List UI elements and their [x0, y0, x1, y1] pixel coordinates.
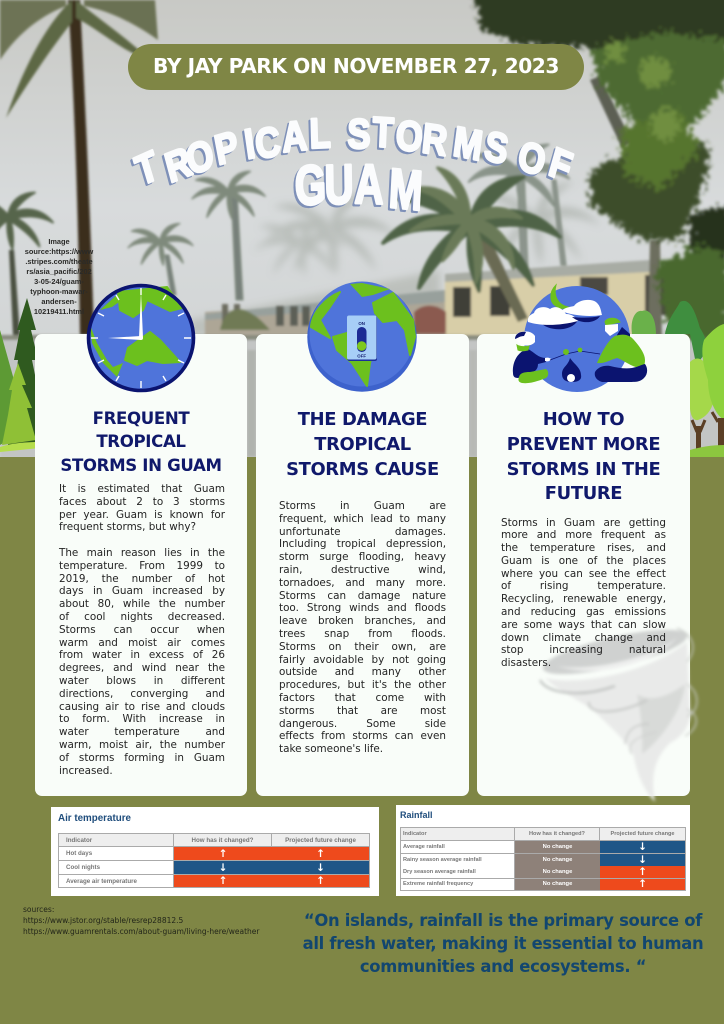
table grid	[400, 827, 686, 891]
body text: stop increasing natural	[501, 644, 666, 656]
body text: 2019, the number of hot	[59, 573, 225, 585]
body text: Storms in Guam are	[279, 500, 446, 512]
sources: https://www.jstor.org/stable/resrep28812.5	[23, 916, 183, 925]
icon: people around campfire with globe	[512, 284, 648, 392]
background photo: storm-blown palms and building	[0, 0, 724, 457]
body text: outside and many other	[279, 666, 446, 678]
table grid: ↑	[219, 848, 227, 860]
body text	[58, 483, 226, 777]
body text: Guam is one of the places	[501, 555, 666, 567]
body text: of rising temperature.	[501, 580, 666, 592]
sources: sources:	[23, 905, 54, 914]
chart: air temperature table	[51, 807, 379, 896]
body text: factors that come with	[279, 692, 446, 704]
body text: effects from storms can even	[279, 730, 446, 742]
image source credit: rs/asia_pacific/202	[26, 267, 92, 276]
table grid: Dry season average rainfall	[403, 869, 476, 875]
panel: the damage tropical storms cause	[256, 334, 469, 796]
sources: https://www.guamrentals.com/about-guam/living-here/weather	[23, 927, 260, 936]
image source credit: source:https://www	[25, 247, 93, 256]
body text: about 80, while the number	[59, 598, 225, 610]
heading	[286, 409, 439, 480]
body text: the temperature rises, and	[501, 542, 666, 554]
panel: how to prevent more storms	[477, 334, 690, 796]
byline pill	[128, 44, 584, 90]
icon: globe with on-off switch: OFF	[357, 354, 366, 358]
quote	[303, 911, 703, 976]
icon: tornado	[538, 627, 700, 803]
far palms	[128, 144, 569, 300]
body text: directions, converging and	[59, 688, 225, 700]
body text: rain, destructive wind,	[279, 564, 446, 576]
table grid	[58, 833, 370, 888]
image source credit: andersen-	[41, 297, 77, 306]
body text: Storms can occur when	[59, 624, 225, 636]
left big palm	[68, 0, 94, 335]
image source credit: 10219411.html	[34, 307, 84, 316]
body text: are some ways that can slow	[501, 619, 666, 631]
heading: THE DAMAGE	[298, 409, 427, 430]
sticks	[550, 351, 600, 360]
image source credit: typhoon-mawar-	[30, 287, 88, 296]
right foliage	[470, 0, 724, 340]
image source credit: 3-05-24/guam-	[34, 277, 84, 286]
table grid: ↑	[219, 875, 227, 887]
body text: unfortunate damages.	[279, 526, 446, 538]
image source credit: Image	[48, 237, 70, 246]
body text: frequent, which lead to many	[279, 513, 446, 525]
body text: faces about 2 to 3 storms	[59, 496, 225, 508]
body text: dangerous. Some side	[279, 718, 446, 730]
campfire	[562, 358, 581, 382]
table grid: Indicator	[66, 836, 92, 844]
table grid: How has it changed?	[529, 831, 585, 837]
body text: tornadoes, and many more.	[279, 577, 446, 589]
table grid: ↓	[316, 862, 325, 874]
table grid: No change	[543, 844, 572, 850]
left person	[513, 349, 546, 378]
icon: illustrated pine trees, left	[0, 298, 36, 452]
heading: TROPICAL	[314, 434, 411, 455]
table grid: Rainy season average rainfall	[403, 856, 482, 862]
heading: PREVENT MORE	[507, 434, 660, 455]
table grid: Average rainfall	[403, 844, 445, 850]
quote: communities and ecosystems. “	[360, 957, 646, 976]
heading: TROPICAL	[96, 432, 186, 451]
body text: temperature. From 1999 to	[59, 560, 225, 572]
body text: water temperature and	[59, 726, 225, 738]
body text: warm, moist air, the number	[59, 739, 225, 751]
table grid: Projected future change	[285, 836, 356, 844]
body text: and reducing gas emissions	[501, 606, 666, 618]
table grid: ↓	[638, 841, 647, 853]
body text: Including tropical depression,	[279, 538, 446, 550]
body text: of storms forming in Guam	[59, 752, 225, 764]
sources	[23, 905, 260, 936]
heading	[507, 409, 660, 504]
body text: down climate change and	[501, 632, 666, 644]
table grid: Projected future change	[610, 831, 675, 837]
body text: Recycling, renewable energy,	[501, 593, 666, 605]
table grid: Hot days	[66, 850, 92, 857]
table grid: How has it changed?	[192, 836, 253, 844]
body text: procedures, but it's the other	[279, 679, 446, 691]
body text: trees snap from floods.	[279, 628, 446, 640]
body text: The main reason lies in the	[59, 547, 225, 559]
olive lower background	[0, 457, 724, 1024]
icon: globe with on-off switch	[307, 282, 417, 392]
table grid: ↓	[638, 854, 647, 866]
title: Tropical Storms of Guam: GUAM	[294, 154, 424, 223]
body text: water blows in different	[59, 675, 225, 687]
trunk behind foliage	[590, 76, 632, 148]
chart: rainfall table	[396, 805, 690, 896]
table grid: ↓	[219, 862, 227, 874]
table grid: ↑	[638, 878, 647, 890]
heading: STORMS CAUSE	[286, 459, 439, 480]
heading	[60, 408, 222, 474]
heading: FUTURE	[545, 483, 622, 504]
switch	[348, 316, 377, 361]
table grid: ↑	[316, 848, 325, 860]
body text: disasters.	[501, 657, 551, 669]
body text: degrees, and wind near the	[59, 662, 225, 674]
body text: from water in excess of 26	[59, 649, 225, 661]
table grid: ↑	[638, 866, 647, 878]
heading: FREQUENT	[93, 408, 189, 428]
heading: HOW TO	[543, 409, 624, 430]
table grid: No change	[543, 856, 572, 862]
panel: frequent tropical storms	[35, 334, 247, 796]
body text: Storms on their own, are	[279, 641, 446, 653]
leaning palm	[468, 222, 528, 322]
body text: increased.	[59, 765, 113, 777]
body text: It is estimated that Guam	[59, 483, 225, 495]
body text	[501, 516, 666, 669]
body text: to form. With increase in	[59, 713, 225, 725]
heading: STORMS IN THE	[507, 459, 660, 480]
body text: storms that are most	[279, 705, 446, 717]
body text: causing air to rise and clouds	[59, 701, 225, 713]
image source credit	[25, 237, 94, 316]
quote: all fresh water, making it essential to human	[303, 934, 703, 953]
clouds	[540, 320, 578, 329]
table grid: ↑	[316, 875, 325, 887]
right person	[617, 327, 630, 340]
body text: fairly avoidable by not going	[279, 654, 446, 666]
table grid: No change	[543, 869, 572, 875]
body text: storm surge flooding, heavy	[279, 551, 446, 563]
byline pill: BY JAY PARK ON NOVEMBER 27, 2023	[153, 54, 559, 78]
table grid: Indicator	[403, 831, 427, 837]
table grid: Average air temperature	[66, 878, 137, 884]
body text: more and more frequent as	[501, 529, 666, 541]
table title: Air temperature	[58, 813, 131, 824]
body text: Storms can damage nature	[279, 590, 446, 602]
building	[205, 300, 445, 338]
body text: leave broken branches, and	[279, 615, 446, 627]
icon: globe with on-off switch: ON	[358, 321, 365, 326]
body text: warm and moist air comes	[59, 637, 225, 649]
ground	[0, 336, 724, 458]
body text: where you can see the effect	[501, 568, 666, 580]
table grid: No change	[543, 881, 572, 887]
table title: Rainfall	[400, 810, 433, 820]
icon: illustrated green trees, right	[632, 301, 724, 457]
body text	[279, 500, 446, 755]
title: Tropical Storms of Guam: TROPICAL STORMS OF	[131, 109, 577, 195]
image source credit: .stripes.com/theate	[25, 257, 93, 266]
table grid: Cool nights	[66, 864, 100, 871]
left edge palm	[9, 250, 20, 335]
body text: days in Guam increased by	[59, 585, 225, 597]
table grid: Extreme rainfall frequency	[403, 881, 473, 887]
body text: of cool nights decreased.	[59, 611, 225, 623]
body text: take someone's life.	[279, 743, 383, 755]
body text: per year. Guam is known for	[59, 509, 225, 521]
icon: globe clock	[86, 284, 196, 392]
body text: too. Strong winds and floods	[279, 602, 446, 614]
body text: frequent storms, but why?	[59, 521, 196, 533]
heading: STORMS IN GUAM	[60, 456, 222, 474]
quote: “On islands, rainfall is the primary source of	[304, 911, 702, 930]
body text: Storms in Guam are getting	[501, 516, 666, 528]
